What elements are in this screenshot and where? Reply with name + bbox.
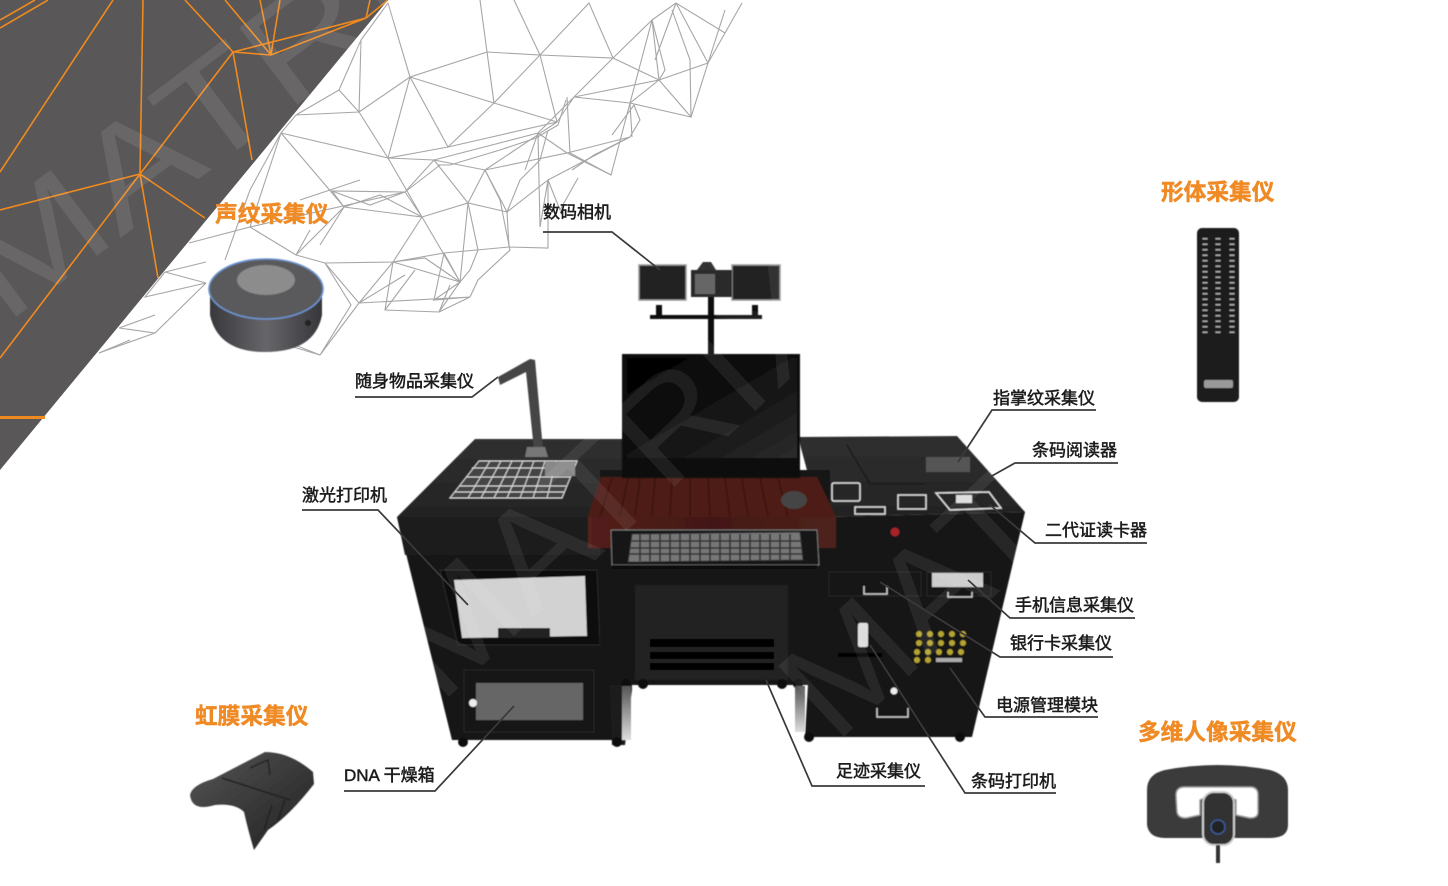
right cabinet: [805, 512, 1025, 737]
printer bay: [440, 570, 600, 645]
left desktop: [397, 439, 625, 517]
label: barcode printer: 条码打印机: [971, 772, 1056, 791]
grey corner triangle: [0, 0, 388, 470]
mouse: [781, 491, 807, 509]
laser printer: [454, 576, 587, 638]
label: ID card reader: 二代证读卡器: [1045, 521, 1147, 540]
multi-dimensional portrait collector: [1147, 765, 1288, 863]
palm scanner: [926, 457, 970, 472]
monitor: [622, 354, 800, 478]
drawers: [829, 572, 921, 596]
label: barcode printer: [870, 645, 1056, 793]
label: DNA dryer: DNA 干燥箱: [344, 766, 435, 785]
title: voice collector: 声纹采集仪: [215, 201, 329, 227]
label: laser printer: [302, 486, 468, 605]
label: footprint collector: 足迹采集仪: [836, 762, 921, 781]
label: phone info collector: 手机信息采集仪: [1015, 596, 1134, 615]
left front band: [397, 517, 604, 555]
title: body collector: 形体采集仪: [1161, 179, 1275, 205]
label: laser printer: 激光打印机: [302, 486, 387, 505]
desk: [397, 359, 1025, 747]
feet: [458, 679, 965, 747]
label: palm print collector: [958, 389, 1096, 462]
body collector: [1197, 228, 1239, 402]
keyboard tray: [611, 530, 819, 565]
label: digital camera: 数码相机: [543, 203, 611, 222]
centre section: [600, 470, 830, 685]
DNA window: [476, 683, 583, 720]
label: belongings collector: 随身物品采集仪: [355, 372, 474, 391]
digital camera assembly: [639, 262, 780, 355]
label: power management: 电源管理模块: [996, 696, 1098, 715]
document camera: [498, 359, 543, 450]
label: ID card reader: [990, 505, 1147, 543]
bottom drawer: [890, 688, 898, 694]
label: palm print collector: 指掌纹采集仪: [993, 389, 1095, 408]
measuring grid mat: [450, 461, 577, 498]
label: barcode reader: [990, 441, 1118, 477]
wood panel: [588, 477, 836, 548]
label: digital camera: [543, 203, 660, 270]
title: iris collector: 虹膜采集仪: [195, 703, 309, 729]
left cabinet: [397, 517, 622, 740]
title: multi-dimensional portrait collector: 多维人像采集仪: [1138, 719, 1297, 745]
iris collector: [190, 752, 314, 850]
label: power management: [950, 668, 1098, 717]
label: footprint collector: [766, 680, 925, 786]
voice collector: [209, 259, 323, 352]
watermark right on desk: MATRIX: [748, 270, 1265, 767]
label: DNA dryer: [344, 706, 514, 791]
label: belongings collector: [355, 372, 498, 397]
red button: [890, 528, 900, 536]
orange mesh on triangle: [0, 0, 388, 358]
lower door: [464, 670, 594, 732]
label: barcode reader: 条码阅读器: [1032, 441, 1117, 460]
keyboard: [628, 532, 803, 562]
label: phone info collector: [968, 580, 1135, 618]
orange bar: [0, 416, 45, 419]
keypad: [914, 631, 966, 663]
background wire mesh: [99, 0, 742, 355]
label: bank card collector: 银行卡采集仪: [1010, 634, 1112, 653]
barcode printer: [858, 623, 868, 647]
label: bank card collector: [880, 582, 1113, 657]
phone reader: [932, 573, 983, 587]
watermark left on desk: MATRIX: [353, 230, 870, 727]
top outlines: [832, 483, 1001, 514]
right desktop: [798, 436, 1025, 517]
